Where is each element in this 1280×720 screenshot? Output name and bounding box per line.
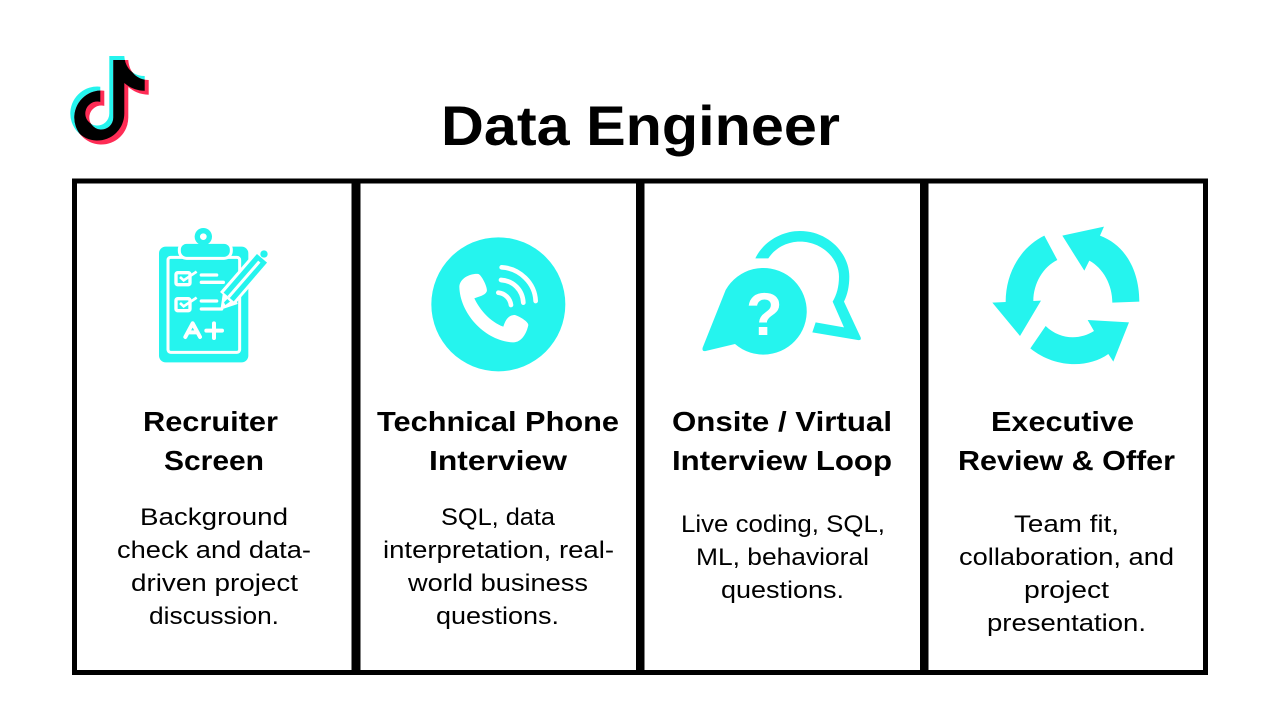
heading: recruiter screen: [143, 406, 278, 476]
heading: technical phone interview: Interview: [429, 445, 567, 476]
panel: onsite or virtual interview loop: [642, 181, 922, 672]
text: onsite description: [681, 511, 885, 604]
text: technical phone description: interpretation, real-: [383, 537, 614, 564]
text: technical phone description: world business: [407, 570, 588, 597]
heading: executive review and offer: [958, 406, 1175, 476]
heading: executive review and offer: Review & Offer: [958, 445, 1175, 476]
text: recruiter screen description: driven project: [131, 570, 298, 597]
panel: technical phone interview: [358, 181, 638, 672]
icon: TikTok logo: [70, 56, 149, 145]
text: technical phone description: questions.: [436, 603, 559, 630]
text: technical phone description: SQL, data: [441, 504, 556, 531]
text: onsite description: Live coding, SQL,: [681, 511, 885, 538]
text: executive description: collaboration, and: [959, 544, 1174, 571]
text: recruiter screen description: discussion.: [149, 603, 279, 630]
heading: recruiter screen: Recruiter: [143, 406, 278, 437]
heading: onsite or virtual interview loop: [672, 406, 892, 476]
heading: recruiter screen: Screen: [164, 445, 264, 476]
heading: technical phone interview: Technical Phone: [377, 406, 619, 437]
text: onsite description: questions.: [721, 577, 844, 604]
text: technical phone description: [383, 504, 614, 630]
icon: cycle arrows: [992, 227, 1139, 364]
heading: onsite or virtual interview loop: Onsite / Virtual: [672, 406, 892, 437]
heading: technical phone interview: [377, 406, 619, 476]
heading: onsite or virtual interview loop: Interview Loop: [672, 445, 892, 476]
icon: phone: [431, 237, 565, 371]
panel: executive review and offer: [926, 181, 1206, 672]
heading: executive review and offer: Executive: [991, 406, 1134, 437]
icon: speech bubbles: [702, 231, 861, 355]
text: recruiter screen description: Background: [140, 504, 288, 531]
text: executive description: presentation.: [987, 610, 1146, 637]
panel: recruiter screen: [74, 181, 354, 672]
icon: speech bubbles: ?: [746, 281, 783, 348]
icon: clipboard: [159, 228, 268, 362]
title: Data Engineer: [441, 94, 840, 157]
text: recruiter screen description: check and data-: [117, 537, 311, 564]
text: recruiter screen description: [117, 504, 311, 630]
text: executive description: project: [1024, 577, 1109, 604]
text: executive description: Team fit,: [1014, 511, 1119, 538]
text: executive description: [959, 511, 1174, 637]
text: onsite description: ML, behavioral: [696, 544, 869, 571]
